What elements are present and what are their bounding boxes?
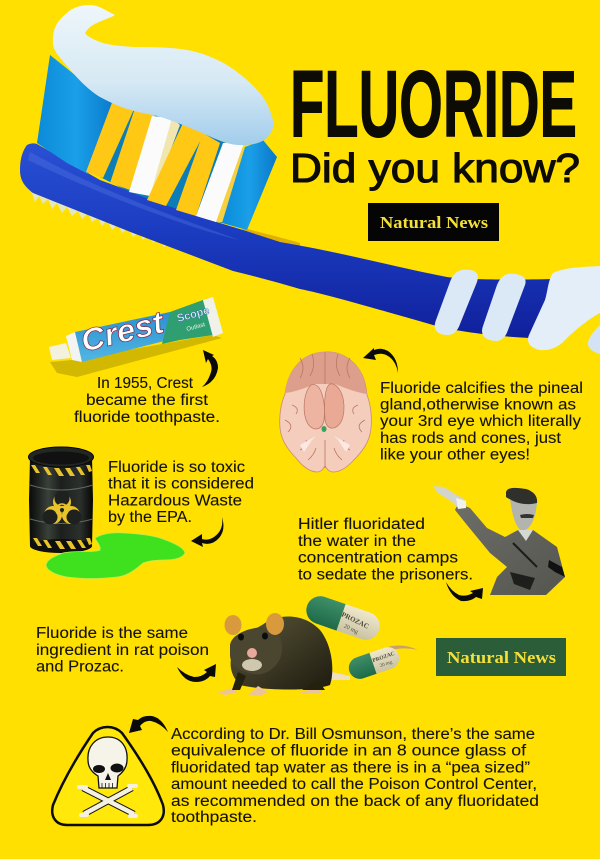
face — [510, 500, 537, 530]
text: camps fact: Hitler fluoridated — [298, 516, 425, 533]
text: hazardous waste fact: Fluoride is so toxic — [108, 459, 245, 476]
text: pea sized fact: amount needed to call the Poison Control Center, — [171, 776, 537, 793]
icon: biohazard symbol — [42, 491, 82, 524]
icon: brain — [280, 352, 371, 472]
badge: Natural News green: Natural News — [447, 648, 556, 667]
pineal gland — [322, 426, 326, 432]
belt and hands — [510, 572, 535, 590]
brush head highlight — [28, 152, 240, 240]
handle band one — [435, 270, 478, 335]
yellow and white bristles — [86, 100, 246, 222]
text: pea sized fact: fluoridated tap water as there is in a “pea sized” — [171, 760, 530, 776]
capsule: large Prozac: PROZAC — [340, 610, 370, 631]
toothbrush illustration — [20, 5, 600, 354]
capsule: small Prozac — [346, 644, 402, 682]
text: pea sized fact — [171, 726, 539, 826]
text: pineal gland fact: like your other eyes! — [380, 447, 530, 464]
badge: Natural News green — [436, 638, 566, 676]
arrow: to puddle — [191, 517, 223, 547]
blue bristles left — [37, 55, 116, 174]
capsule: small Prozac: PROZAC — [372, 651, 396, 664]
text: camps fact: to sedate the prisoners. — [298, 567, 473, 584]
capsule: large Prozac — [303, 592, 383, 644]
text: camps fact: concentration camps — [298, 550, 458, 567]
arrow: to toothpaste — [202, 350, 218, 387]
icon: rat — [217, 613, 418, 696]
icon: green puddle — [46, 533, 185, 578]
icon: Crest toothpaste tube — [49, 297, 223, 377]
icon: poison warning triangle — [52, 727, 164, 825]
icon: Crest toothpaste tube: Outlast — [186, 322, 206, 333]
hand — [433, 486, 467, 508]
text: Crest fact: became the first — [86, 392, 209, 409]
bottom bristle bumps — [32, 185, 221, 258]
text: rat poison fact: and Prozac. — [36, 658, 124, 676]
text: hazardous waste fact: that it is considered — [108, 476, 254, 493]
crossbones — [79, 786, 136, 816]
arrow: to rat — [177, 664, 216, 682]
capsule: small Prozac: 20 mg — [379, 660, 393, 669]
figure: saluting man in uniform — [433, 486, 565, 595]
capsule: large Prozac: 20 mg — [343, 624, 359, 636]
text: pineal gland fact: has rods and cones, just — [380, 430, 562, 447]
text: pineal gland fact — [380, 380, 583, 464]
toothpaste — [53, 5, 274, 145]
text: Crest fact — [74, 375, 220, 426]
text: pea sized fact: toothpaste. — [171, 809, 257, 826]
brush handle — [20, 143, 600, 338]
text: pineal gland fact: gland,otherwise known as — [380, 396, 576, 414]
cap — [506, 488, 537, 504]
text: pea sized fact: According to Dr. Bill Osmunson, there’s the same — [171, 726, 535, 743]
text: pea sized fact: as recommended on the back of any fluoridated — [171, 793, 539, 810]
badge: Natural News black — [368, 203, 499, 241]
text: hazardous waste fact: by the EPA. — [108, 509, 192, 526]
text: pea sized fact: equivalence of fluoride in an 8 ounce glass of — [171, 742, 527, 760]
yellow handle rim — [240, 228, 300, 250]
collar — [518, 530, 533, 541]
text: hazardous waste fact: Hazardous Waste — [108, 492, 242, 510]
text: camps fact — [298, 516, 473, 584]
handle band two — [482, 274, 526, 341]
text: pineal gland fact: your 3rd eye which literally — [380, 413, 581, 430]
skull — [88, 737, 127, 788]
blue bristles right — [222, 140, 277, 230]
icon: toxic barrel — [28, 447, 94, 553]
white grip — [528, 266, 600, 350]
text: Crest fact: In 1955, Crest — [97, 375, 194, 392]
text: rat poison fact: Fluoride is the same — [36, 625, 188, 642]
subtitle: Did you know? — [290, 145, 580, 191]
text: hazardous waste fact — [108, 459, 254, 526]
arrow: to figure — [446, 582, 483, 601]
teal inner bristles — [100, 100, 226, 223]
text: pineal gland fact: Fluoride calcifies the pineal — [380, 380, 583, 397]
text: Crest fact: fluoride toothpaste. — [74, 409, 220, 426]
text: rat poison fact: ingredient in rat poison — [36, 642, 209, 659]
icon: Crest toothpaste tube: Crest — [77, 304, 169, 359]
text: rat poison fact — [36, 625, 209, 676]
grip end — [588, 325, 600, 354]
armband — [548, 560, 565, 577]
badge: Natural News black: Natural News — [380, 213, 488, 232]
text: camps fact: the water in the — [298, 533, 416, 550]
arrow: to brain — [363, 348, 398, 373]
arrow: to warning triangle — [129, 716, 168, 733]
icon: Crest toothpaste tube: Scope — [176, 305, 211, 325]
